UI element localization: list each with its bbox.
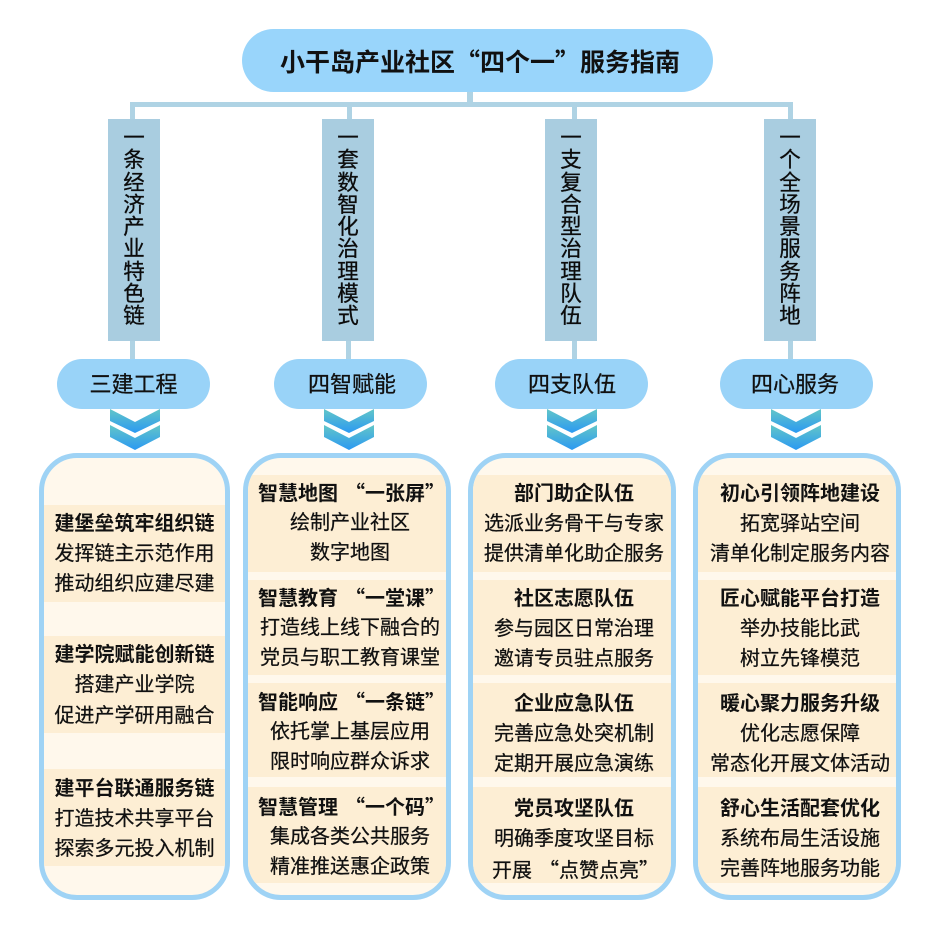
- vertical heading: 一支复合型治理队伍: 队: [560, 282, 582, 306]
- text: 智慧教育: [258, 582, 445, 669]
- band 3: [473, 683, 671, 777]
- text: 智慧管理: 集成各类公共服务: [270, 826, 430, 848]
- vertical heading: 一个全场景服务阵地: 阵: [779, 282, 801, 306]
- vertical heading: 一套数智化治理模式: 式: [337, 304, 359, 328]
- text: 智慧管理: [258, 791, 445, 878]
- text: 建堡垒筑牢组织链: 建堡垒筑牢组织链: [54, 513, 214, 535]
- vertical heading: 一个全场景服务阵地: 服: [779, 237, 801, 261]
- vertical heading: 一支复合型治理队伍: 合: [560, 193, 582, 217]
- text: 舒心生活配套优化: 舒心生活配套优化: [720, 798, 880, 820]
- text: 社区志愿队伍: [494, 588, 654, 670]
- vertical heading: 一个全场景服务阵地: 务: [779, 260, 801, 284]
- vertical heading: 一套数智化治理模式: 一: [337, 126, 359, 150]
- vertical heading: 一个全场景服务阵地: 个: [779, 148, 801, 172]
- vertical heading: 一支复合型治理队伍: 型: [560, 215, 582, 239]
- vertical heading: 一条经济产业特色链: [108, 119, 160, 341]
- vertical heading: 一支复合型治理队伍: 治: [560, 237, 582, 261]
- text: 暖心聚力服务升级: [710, 692, 890, 775]
- title: [242, 29, 713, 92]
- vertical heading: 一条经济产业特色链: 一: [123, 126, 145, 150]
- text: 智慧教育: 打造线上线下融合的: [260, 617, 440, 639]
- pill: 三建工程: 三建工程: [89, 372, 178, 397]
- text: 建平台联通服务链: [54, 778, 214, 860]
- pill: 四智赋能: [274, 359, 427, 409]
- vertical heading: 一支复合型治理队伍: 理: [560, 260, 582, 284]
- band 1: [248, 475, 446, 572]
- vertical heading: 一个全场景服务阵地: [764, 119, 816, 341]
- text: 部门助企队伍: 部门助企队伍: [514, 483, 634, 505]
- text: 初心引领阵地建设: 清单化制定服务内容: [710, 543, 890, 565]
- text: 暖心聚力服务升级: 常态化开展文体活动: [710, 753, 890, 775]
- text: 部门助企队伍: 提供清单化助企服务: [484, 543, 664, 565]
- text: 智慧管理: 精准推送惠企政策: [270, 856, 430, 878]
- band: 建堡垒筑牢组织链: [44, 505, 225, 602]
- vertical heading: 一个全场景服务阵地: 全: [779, 171, 801, 195]
- text: 社区志愿队伍: 邀请专员驻点服务: [494, 648, 654, 670]
- text: 智能响应: 智能响应 “一条链”: [258, 686, 445, 715]
- text: 舒心生活配套优化: 完善阵地服务功能: [720, 858, 880, 880]
- vertical heading: 一个全场景服务阵地: 场: [779, 193, 801, 217]
- text: 智慧管理: 智慧管理 “一个码”: [258, 791, 445, 820]
- text: 建堡垒筑牢组织链: 发挥链主示范作用: [54, 543, 214, 565]
- text: 舒心生活配套优化: [720, 798, 880, 880]
- text: 舒心生活配套优化: 系统布局生活设施: [720, 828, 880, 850]
- text: 部门助企队伍: [484, 482, 664, 565]
- text: 智慧地图: 绘制产业社区: [290, 512, 410, 534]
- vertical heading: 一个全场景服务阵地: 地: [779, 304, 801, 328]
- vertical heading: 一套数智化治理模式: 套: [337, 148, 359, 172]
- vertical heading: 一条经济产业特色链: 业: [123, 237, 145, 261]
- panel: 三建工程: [39, 453, 230, 900]
- pill: 四心服务: [720, 359, 873, 409]
- panel: 四心服务: [693, 453, 901, 900]
- vertical heading: 一支复合型治理队伍: 支: [560, 148, 582, 172]
- band 2: [248, 580, 446, 675]
- text: 社区志愿队伍: 社区志愿队伍: [514, 588, 634, 610]
- text: 建堡垒筑牢组织链: 推动组织应建尽建: [54, 573, 214, 595]
- pill: 四心服务: 四心服务: [751, 372, 839, 397]
- text: 智慧地图: [258, 477, 445, 564]
- vertical heading: 一套数智化治理模式: 智: [337, 193, 359, 217]
- text: 初心引领阵地建设: [710, 482, 890, 565]
- text: 智慧教育: 党员与职工教育课堂: [260, 647, 440, 669]
- panel: 四智赋能: [243, 453, 451, 900]
- text: 党员攻坚队伍: 明确季度攻坚目标: [494, 828, 654, 850]
- text: 企业应急队伍: 企业应急队伍: [514, 693, 634, 715]
- band: 建学院赋能创新链: [44, 636, 225, 733]
- text: 建学院赋能创新链: 搭建产业学院: [74, 674, 194, 696]
- band 4: [698, 787, 896, 883]
- vertical heading: 一套数智化治理模式: [322, 119, 374, 341]
- vertical heading: 一套数智化治理模式: 化: [337, 215, 359, 239]
- pill: 四支队伍: 四支队伍: [528, 372, 616, 397]
- vertical heading: 一条经济产业特色链: 色: [123, 282, 145, 306]
- text: 社区志愿队伍: 参与园区日常治理: [494, 618, 654, 640]
- text: 建学院赋能创新链: 建学院赋能创新链: [54, 644, 214, 666]
- vertical heading: 一支复合型治理队伍: 伍: [560, 304, 582, 328]
- icon: chevron arrows: [110, 409, 821, 450]
- vertical heading: 一套数智化治理模式: 理: [337, 260, 359, 284]
- band: 建平台联通服务链: [44, 769, 225, 866]
- vertical heading: 一条经济产业特色链: 济: [123, 193, 145, 217]
- title: 小干岛产业社区“四个一”服务指南: [280, 43, 680, 79]
- text: 建平台联通服务链: 探索多元投入机制: [54, 838, 214, 860]
- vertical heading: 一个全场景服务阵地: 景: [779, 215, 801, 239]
- panel: 四支队伍: [468, 453, 676, 900]
- pill: 三建工程: [57, 359, 210, 409]
- band 3: [248, 683, 446, 777]
- vertical heading: 一个全场景服务阵地: 一: [779, 126, 801, 150]
- text: 企业应急队伍: [494, 692, 654, 775]
- vertical heading: 一条经济产业特色链: 特: [123, 260, 145, 284]
- vertical heading: 一套数智化治理模式: 模: [337, 282, 359, 306]
- vertical heading: 一条经济产业特色链: 链: [123, 304, 145, 328]
- text: 智能响应: 限时响应群众诉求: [270, 751, 430, 773]
- vertical heading: 一套数智化治理模式: 治: [337, 237, 359, 261]
- band 2: [698, 580, 896, 675]
- text: 党员攻坚队伍: 党员攻坚队伍: [514, 798, 634, 820]
- band 4: [473, 787, 671, 883]
- text: 智慧地图: 数字地图: [310, 542, 390, 564]
- connector tree: [130, 92, 793, 359]
- text: 智慧地图: 智慧地图 “一张屏”: [258, 477, 445, 506]
- text: 建学院赋能创新链: [54, 644, 214, 727]
- text: 党员攻坚队伍: 开展 “点赞点亮”: [492, 854, 659, 883]
- vertical heading: 一条经济产业特色链: 产: [123, 215, 145, 239]
- text: 暖心聚力服务升级: 优化志愿保障: [740, 723, 860, 745]
- band 1: [473, 475, 671, 572]
- band 4: [248, 787, 446, 883]
- pill: 四支队伍: [495, 359, 648, 409]
- text: 匠心赋能平台打造: 树立先锋模范: [740, 648, 860, 670]
- text: 暖心聚力服务升级: 暖心聚力服务升级: [720, 693, 880, 715]
- band 3: [698, 683, 896, 777]
- vertical heading: 一条经济产业特色链: 条: [123, 148, 145, 172]
- pill: 四智赋能: 四智赋能: [308, 372, 396, 397]
- text: 智能响应: 依托掌上基层应用: [270, 721, 430, 743]
- text: 初心引领阵地建设: 初心引领阵地建设: [720, 483, 880, 505]
- text: 建平台联通服务链: 打造技术共享平台: [54, 808, 214, 830]
- vertical heading: 一支复合型治理队伍: 一: [560, 126, 582, 150]
- text: 企业应急队伍: 完善应急处突机制: [494, 723, 654, 745]
- text: 建平台联通服务链: 建平台联通服务链: [54, 778, 214, 800]
- vertical heading: 一套数智化治理模式: 数: [337, 171, 359, 195]
- text: 匠心赋能平台打造: 举办技能比武: [740, 618, 860, 640]
- vertical heading: 一条经济产业特色链: 经: [123, 171, 145, 195]
- vertical heading: 一支复合型治理队伍: 复: [560, 171, 582, 195]
- text: 党员攻坚队伍: [492, 798, 659, 883]
- text: 企业应急队伍: 定期开展应急演练: [494, 753, 654, 775]
- text: 部门助企队伍: 选派业务骨干与专家: [484, 513, 664, 535]
- text: 智慧教育: 智慧教育 “一堂课”: [258, 582, 445, 611]
- vertical heading: 一支复合型治理队伍: [545, 119, 597, 341]
- band 2: [473, 580, 671, 675]
- text: 匠心赋能平台打造: 匠心赋能平台打造: [720, 588, 880, 610]
- text: 智能响应: [258, 686, 445, 773]
- text: 建堡垒筑牢组织链: [54, 512, 214, 595]
- text: 初心引领阵地建设: 拓宽驿站空间: [740, 513, 860, 535]
- band 1: [698, 475, 896, 572]
- text: 匠心赋能平台打造: [720, 588, 880, 670]
- text: 建学院赋能创新链: 促进产学研用融合: [54, 705, 214, 727]
